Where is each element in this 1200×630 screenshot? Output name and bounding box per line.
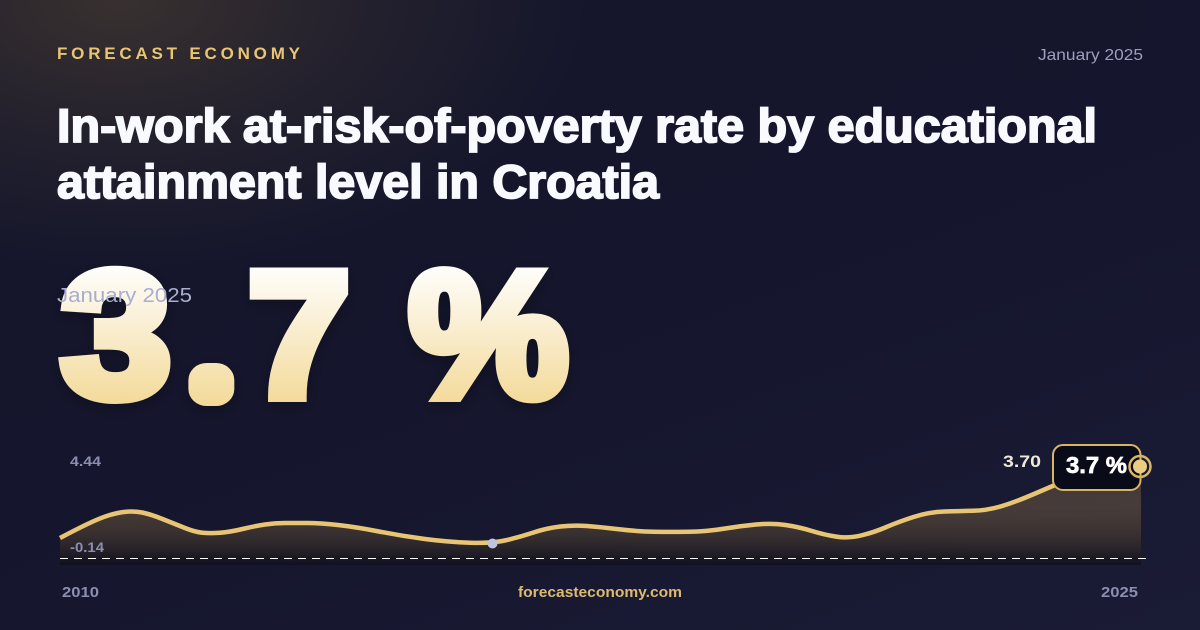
line chart — [60, 445, 1150, 565]
date top right: January 2025 — [1038, 47, 1143, 64]
brand label: FORECAST ECONOMY — [57, 44, 301, 63]
end year: 2025 — [1101, 584, 1138, 601]
last value label: 3.70 — [1003, 452, 1041, 471]
baseline — [60, 558, 1146, 560]
big value: % — [409, 235, 568, 434]
chart line — [60, 485, 1055, 543]
axis max label: 4.44 — [70, 453, 101, 469]
big value: . — [202, 335, 220, 402]
value callout: 3.7 % — [1066, 452, 1127, 478]
start year: 2010 — [62, 584, 99, 601]
big value: 7 — [248, 235, 350, 434]
big value: 3 — [61, 235, 171, 434]
min marker — [488, 538, 498, 548]
title: attainment level in Croatia — [57, 155, 660, 208]
value callout — [1053, 445, 1140, 490]
title: In-work at-risk-of-poverty rate by educational — [57, 99, 1097, 152]
end marker — [1130, 456, 1150, 477]
title — [57, 99, 1097, 208]
chart area fill — [60, 466, 1141, 565]
big value — [61, 235, 568, 434]
date overlay: January 2025 — [57, 285, 192, 307]
axis min label: -0.14 — [70, 539, 104, 555]
source url: forecasteconomy.com — [518, 584, 682, 601]
